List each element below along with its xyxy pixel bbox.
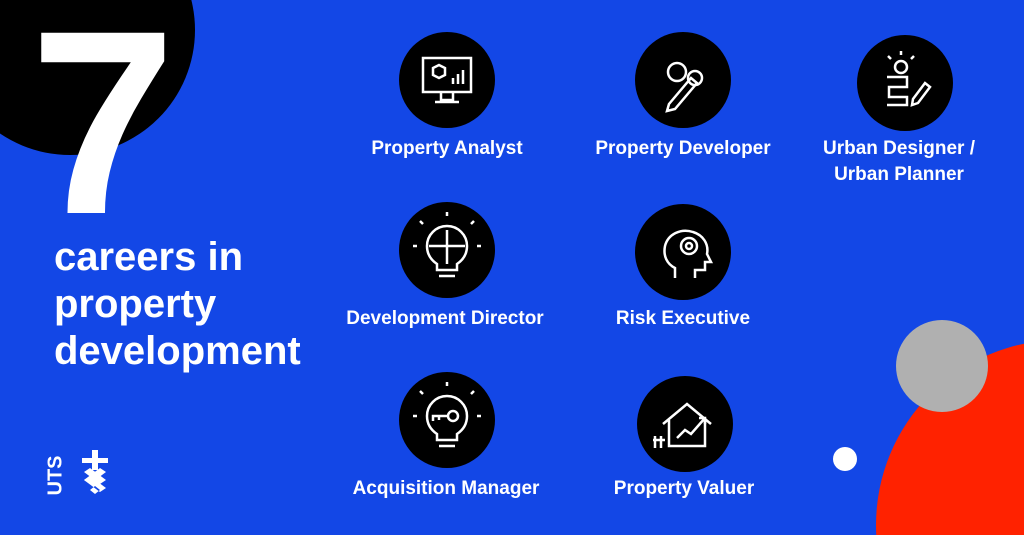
label: urban designer: Urban Designer / xyxy=(823,138,975,159)
label: property developer: Property Developer xyxy=(595,138,771,159)
label: property valuer: Property Valuer xyxy=(614,478,754,499)
subtitle xyxy=(54,235,301,373)
label: development director: Development Director xyxy=(346,308,544,329)
icon: property valuer xyxy=(637,376,733,472)
subtitle: careers in xyxy=(54,235,243,279)
logo: UTS xyxy=(44,450,108,496)
label: acquisition manager: Acquisition Manager xyxy=(353,478,539,499)
icon: development director xyxy=(399,202,495,298)
decorative red circle xyxy=(876,340,1024,535)
icon: property analyst xyxy=(399,32,495,128)
icon: property developer xyxy=(635,32,731,128)
icon: risk executive xyxy=(635,204,731,300)
decorative white dot xyxy=(833,447,857,471)
label: risk executive: Risk Executive xyxy=(616,308,750,329)
icon: acquisition manager xyxy=(399,372,495,468)
subtitle: property xyxy=(54,282,216,326)
label: property analyst: Property Analyst xyxy=(371,138,523,159)
logo: UTS: UTS xyxy=(44,456,66,496)
label: urban designer xyxy=(823,138,975,185)
label: urban designer: Urban Planner xyxy=(834,164,964,185)
decorative black circle xyxy=(0,0,195,155)
decorative grey circle xyxy=(896,320,988,412)
icon: urban designer xyxy=(857,35,953,131)
subtitle: development xyxy=(54,329,301,373)
